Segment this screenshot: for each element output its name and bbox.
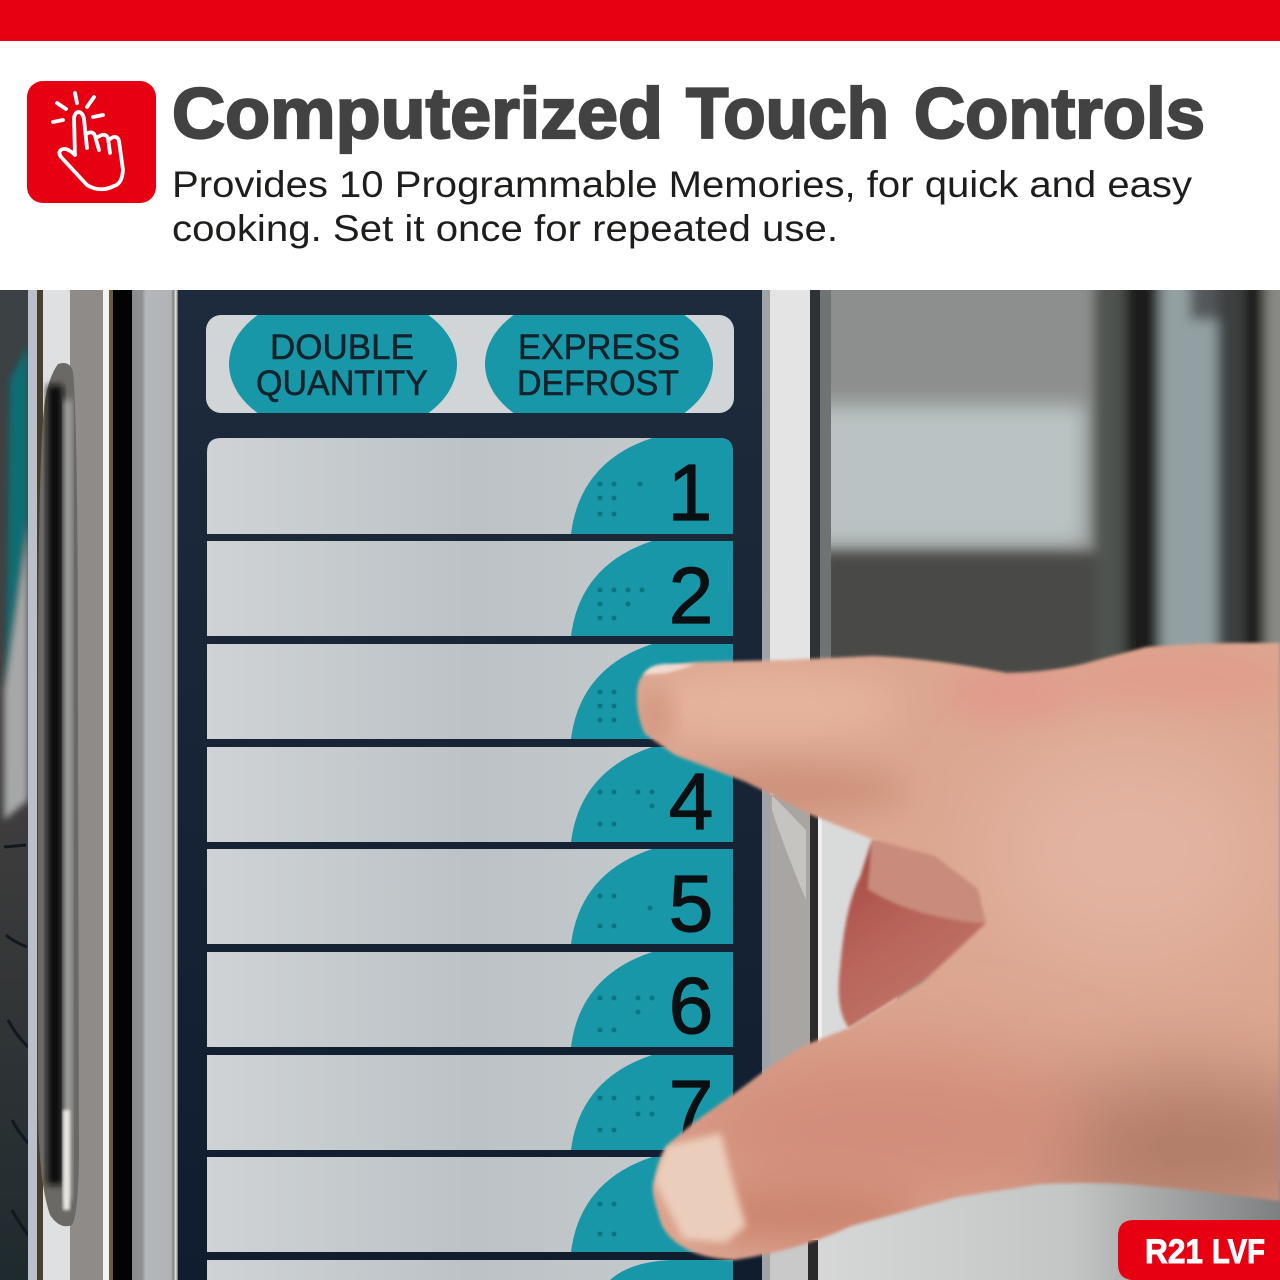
memory button 1 [207,438,733,537]
left: door handle and steel frame [0,290,178,1280]
background: blurred kitchen [800,270,1280,1280]
memory button 9 [207,1260,733,1280]
memory button 7: 7 [669,1064,713,1153]
icon: touch hand [27,81,156,203]
description text [172,163,1192,249]
index fingernail [643,664,696,675]
title: Controls [914,75,1205,154]
description text: Provides 10 Programmable Memories, for quick and easy [172,163,1192,205]
model badge [1118,1220,1280,1280]
memory button 6 [207,952,733,1050]
preset buttons: double quantity and express defrost: EXPRESS [518,328,680,367]
preset buttons: double quantity and express defrost: DOUBLE [270,328,414,367]
memory button 2: 2 [669,551,713,640]
memory button 6: 6 [669,961,713,1050]
memory button 5: 5 [669,859,713,948]
memory button 4: 4 [669,757,713,846]
memory button 4 [207,747,733,846]
product photo [0,270,1280,1280]
control panel [178,290,768,1280]
hand pressing button 3 [620,630,1280,1270]
model badge: R21 [1145,1233,1203,1271]
description text: cooking. Set it once for repeated use. [172,207,838,249]
memory button 8 [207,1157,733,1252]
memory button 5 [207,849,733,948]
memory button 7 [207,1055,733,1153]
memory button 2 [207,541,733,640]
thumbnail [654,1133,746,1243]
preset buttons: double quantity and express defrost [206,315,734,413]
model badge: LVF [1212,1233,1265,1271]
top red band [0,0,1280,41]
memory button 1: 1 [668,448,712,537]
memory button 3 [207,644,733,739]
back finger [836,838,988,1028]
title: Touch [686,75,889,154]
preset buttons: double quantity and express defrost: QUANTITY [256,364,428,403]
back of hand, index finger and thumb [620,630,1280,1270]
title [172,75,1205,154]
title: Computerized [172,75,663,154]
right steel trim [762,290,831,1280]
preset buttons: double quantity and express defrost: DEFROST [517,364,679,403]
